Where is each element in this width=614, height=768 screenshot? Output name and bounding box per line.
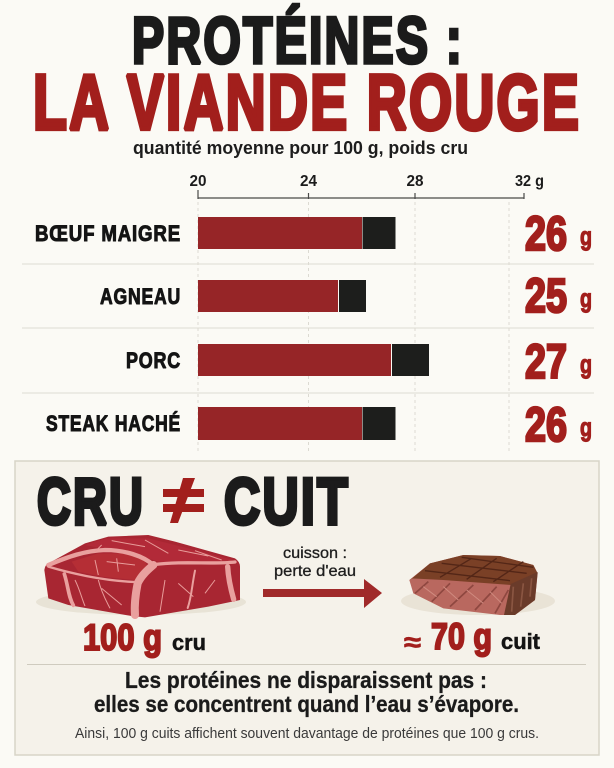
label: 70 g cuit bbox=[404, 616, 541, 657]
panel heading: CUIT bbox=[224, 464, 350, 538]
panel: cru vs cuit bbox=[15, 461, 599, 755]
conclusion text: Les protéines ne disparaissent pas : bbox=[125, 667, 487, 693]
row: bœuf maigre: 26 bbox=[525, 208, 567, 261]
row: agneau: 25 bbox=[525, 270, 567, 323]
text: cuisson perte d'eau: cuisson : bbox=[283, 545, 347, 562]
text: cuisson perte d'eau bbox=[274, 545, 356, 580]
row: steak haché: g bbox=[580, 412, 592, 442]
row: bœuf maigre: BŒUF MAIGRE bbox=[35, 221, 181, 246]
subtitle: quantité moyenne pour 100 g, poids cru bbox=[133, 137, 468, 158]
row: steak haché: 26 bbox=[525, 399, 567, 452]
label: 70 g cuit: ≈ bbox=[404, 627, 421, 657]
label: 100 g cru: 100 g bbox=[83, 617, 162, 658]
label: 70 g cuit: cuit bbox=[501, 629, 541, 654]
row: porc: PORC bbox=[126, 348, 181, 373]
panel heading: CRU bbox=[37, 464, 145, 538]
footnote: Ainsi, 100 g cuits affichent souvent davantage de protéines que 100 g crus. bbox=[75, 726, 539, 742]
panel heading bbox=[37, 464, 350, 538]
row: agneau bbox=[100, 270, 592, 323]
axis: 32 g bbox=[515, 173, 544, 190]
row: bœuf maigre: g bbox=[580, 221, 592, 251]
axis bbox=[190, 173, 544, 199]
arrow bbox=[263, 579, 382, 608]
label: 100 g cru: cru bbox=[172, 630, 206, 655]
row: porc bbox=[126, 336, 592, 389]
conclusion text: elles se concentrent quand l’eau s’évapore. bbox=[94, 691, 519, 717]
axis: 24 bbox=[300, 173, 317, 190]
title bbox=[33, 3, 581, 146]
icon: cooked steak bbox=[401, 555, 555, 615]
conclusion text bbox=[94, 667, 519, 717]
label: 70 g cuit: 70 g bbox=[431, 616, 492, 657]
axis: 20 bbox=[190, 173, 207, 190]
row: bœuf maigre bbox=[35, 208, 592, 261]
row: porc: 27 bbox=[525, 336, 567, 389]
text: cuisson perte d'eau: perte d'eau bbox=[274, 563, 356, 580]
axis: 28 bbox=[406, 173, 424, 190]
row: porc: g bbox=[580, 349, 592, 379]
row: agneau: g bbox=[580, 283, 592, 313]
row: steak haché: STEAK HACHÉ bbox=[46, 411, 181, 436]
title line: PROTÉINES: PROTÉINES : bbox=[132, 3, 464, 77]
icon: raw steak bbox=[36, 535, 246, 617]
row: steak haché bbox=[46, 399, 592, 452]
row: agneau: AGNEAU bbox=[100, 284, 181, 309]
